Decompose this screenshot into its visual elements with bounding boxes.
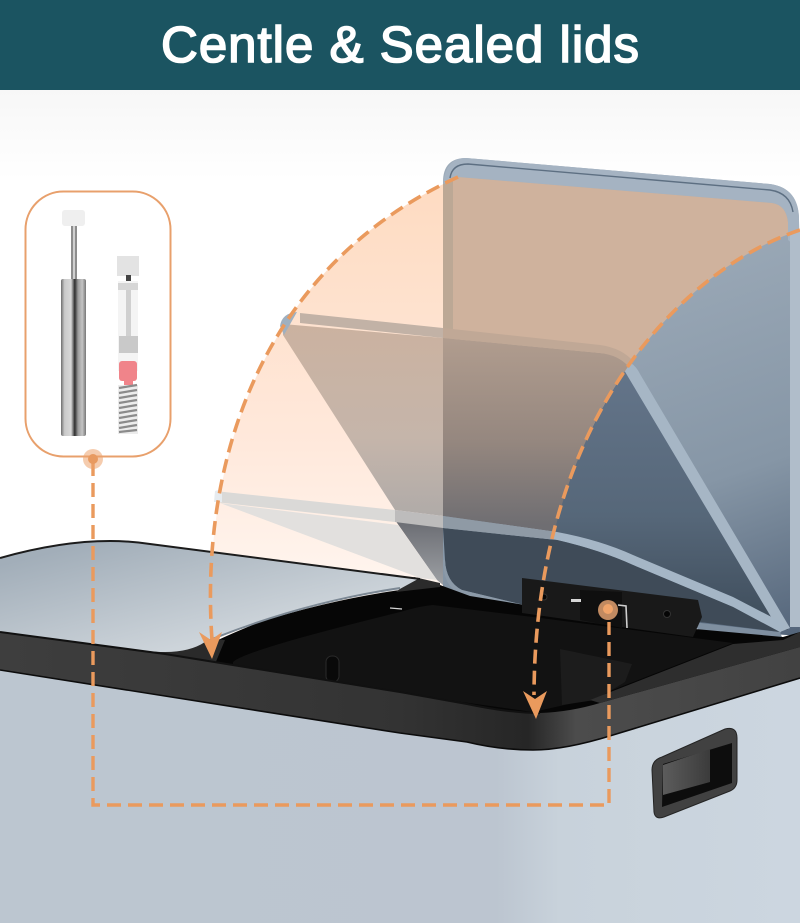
dashed swing arc: inner bbox=[534, 230, 800, 695]
connector dot: callout bbox=[83, 449, 103, 469]
opened lid: three positions bbox=[190, 158, 800, 660]
bin opening bbox=[195, 585, 800, 716]
hinge plate bbox=[522, 578, 702, 637]
lid mid position: translucent face bbox=[283, 324, 443, 516]
lid mid position: corner outside arc bbox=[280, 312, 297, 335]
lid fully open: blue shell bbox=[443, 158, 800, 636]
callout: spring damper detail bbox=[26, 192, 170, 456]
dashed connector: callout to hinge bbox=[93, 462, 609, 805]
bin body bbox=[0, 660, 800, 923]
bucket notch bbox=[326, 656, 339, 682]
connector dot: hinge bbox=[598, 600, 618, 620]
side handle bbox=[652, 728, 737, 818]
black rim bbox=[0, 632, 800, 750]
title banner: Centle & Sealed lids bbox=[161, 16, 639, 73]
arrow: inner arc head bbox=[523, 691, 547, 719]
rim surface beside lid bbox=[140, 638, 225, 664]
arrow: outer arc head bbox=[199, 632, 222, 659]
icon: piston cutaway with spring bbox=[117, 256, 139, 434]
sector tint: coloured copies of the lid inside the swing arc bbox=[214, 177, 788, 638]
lid low position: bar and lip bbox=[500, 523, 785, 633]
lid mid position: top bar bbox=[300, 313, 443, 338]
title banner bbox=[0, 0, 800, 90]
inner bucket bbox=[233, 605, 733, 712]
dashed swing arc: outer bbox=[210, 177, 458, 640]
icon: assembled piston rod bbox=[61, 210, 86, 436]
lid low position: bar bbox=[215, 491, 395, 522]
lid low position: pale face bbox=[220, 503, 437, 580]
closed lid bbox=[0, 541, 440, 664]
lid mid position: dark inner face right of arc bbox=[533, 364, 788, 630]
